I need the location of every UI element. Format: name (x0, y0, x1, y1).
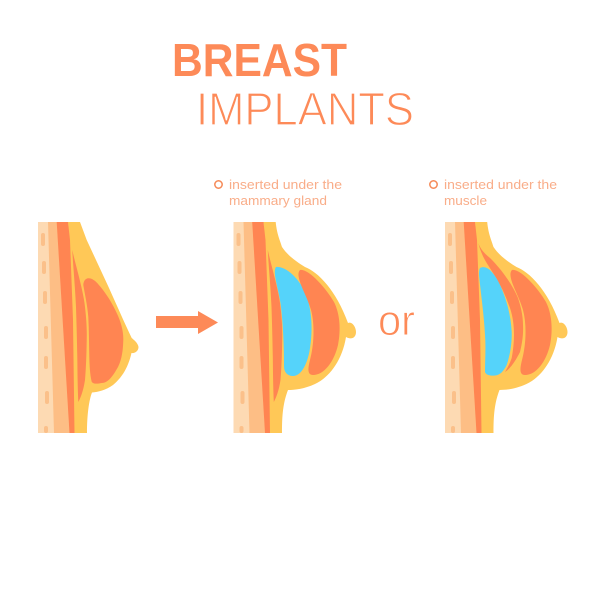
arrow (156, 311, 218, 334)
label: under the mammary gland: mammary gland (229, 194, 327, 208)
figure: implant under the mammary gland (234, 222, 356, 433)
title: IMPLANTS (196, 83, 414, 135)
title (172, 34, 414, 135)
label: under the mammary gland (215, 178, 342, 208)
figure: implant under the muscle (445, 222, 568, 433)
label: under the muscle: inserted under the (444, 178, 557, 192)
figure: natural breast (38, 222, 138, 433)
label: under the muscle: muscle (444, 194, 487, 208)
or: or (378, 297, 415, 345)
label: under the mammary gland: inserted under the (229, 178, 342, 192)
label: under the muscle (430, 178, 557, 208)
title: BREAST (172, 34, 347, 86)
